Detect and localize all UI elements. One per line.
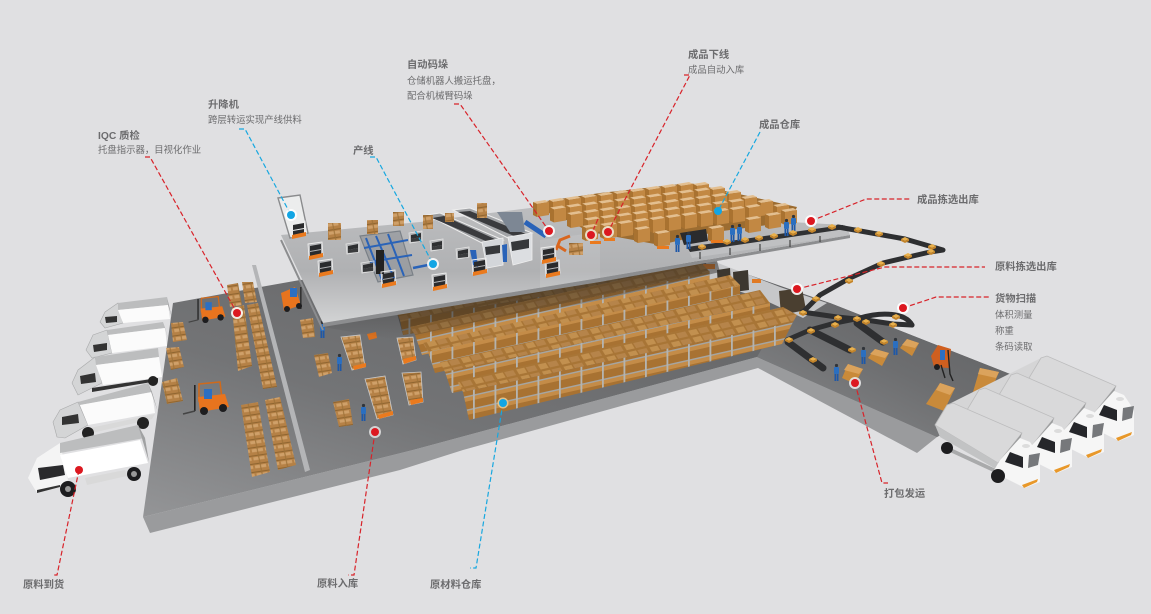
callout: finished goods warehouse: 成品仓库	[759, 118, 800, 131]
callout: material picking	[791, 260, 1057, 295]
panel: conveyor parcels	[698, 224, 936, 363]
panel: inbound shelf carts	[341, 332, 423, 419]
callout: raw material arrival	[23, 466, 83, 591]
callout: cargo scanning: 体积测量	[995, 309, 1033, 320]
callout: raw material arrival: 原料到货	[23, 578, 64, 591]
truck fleet canvas backing	[947, 358, 1116, 433]
icon: inbound truck 5	[100, 297, 172, 328]
chart: material rack row C	[423, 275, 740, 373]
panel: mezzanine platform	[281, 208, 850, 330]
icon: inbound truck 1	[28, 425, 149, 497]
panel: spiral conveyor to warehouse	[803, 227, 943, 312]
chart: material rack row A	[457, 307, 797, 420]
callout: raw material warehouse: 原材料仓库	[430, 578, 481, 591]
icon: inbound truck 3	[72, 348, 162, 395]
panel: lower floor slab side	[143, 357, 937, 533]
icon: sorting workers	[834, 338, 898, 381]
callout: raw material inbound: 原料入库	[317, 577, 358, 590]
callout: production line: 产线	[353, 144, 374, 157]
callout: auto palletizing: 自动码垛	[407, 58, 449, 71]
callout: finished goods picking	[805, 193, 979, 227]
callout: cargo scanning: 货物扫描	[995, 292, 1036, 305]
panel: outbound conveyor table	[687, 225, 850, 259]
callout: finished goods warehouse	[714, 118, 800, 215]
callout: lift: 跨层转运实现产线供料	[208, 114, 302, 125]
callout: finished goods picking: 成品拣选出库	[917, 193, 979, 206]
icon: inbound truck 4	[86, 322, 170, 358]
panel: AGV carts	[308, 231, 560, 291]
chart: material rack row E	[397, 270, 660, 335]
panel: shipping floor	[757, 300, 1033, 437]
callout: auto palletizing: 仓储机器人搬运托盘，	[407, 75, 501, 86]
panel: sorting conveyors	[787, 312, 912, 368]
panel: production line stations	[427, 208, 570, 268]
back wall with dark racks	[683, 258, 827, 318]
callout: cargo scanning: 条码读取	[995, 341, 1033, 352]
callout: packing and shipping	[849, 377, 926, 500]
icon: outbound truck B	[967, 388, 1072, 473]
callout: material picking: 原料拣选出库	[995, 260, 1057, 273]
panel: parcels on shipping floor	[842, 339, 999, 411]
panel: mezzanine shadow on racks	[323, 261, 720, 340]
icon: picking workers	[675, 215, 796, 252]
callout: IQC inspection	[98, 129, 243, 319]
icon: lift frame	[278, 195, 308, 239]
callout: lift: 升降机	[208, 98, 240, 111]
callout: finished goods off line: 成品下线	[688, 48, 730, 61]
callout: raw material warehouse	[430, 398, 508, 591]
callout: cargo scanning: 称重	[995, 325, 1014, 336]
icon: outbound truck D	[1029, 356, 1134, 441]
chart: material rack row D	[410, 262, 710, 355]
panel: mezzanine material stacks	[328, 203, 583, 255]
callout: finished goods off line	[585, 48, 744, 241]
chart: material rack row B	[440, 290, 770, 393]
callout: cargo scanning	[897, 292, 1036, 352]
panel: inbound pallet stacks	[162, 282, 353, 477]
icon: floor workers	[320, 321, 366, 421]
callout: IQC inspection: 托盘指示器，目视化作业	[98, 144, 201, 155]
callout: IQC inspection: IQC 质检	[98, 129, 140, 142]
callout: production line	[353, 144, 439, 270]
callout: raw material inbound	[317, 426, 381, 590]
callout: auto palletizing: 配合机械臂码垛	[407, 90, 473, 101]
divider wall on lower floor	[252, 265, 310, 472]
icon: outbound forklift	[931, 345, 953, 381]
callout: packing and shipping: 打包发运	[884, 487, 926, 500]
callout: auto palletizing	[407, 58, 555, 237]
panel: finished goods warehouse pallets	[533, 182, 797, 249]
icon: forklifts	[183, 287, 302, 415]
callout: finished goods off line: 成品自动入库	[688, 64, 744, 75]
callout: lift	[208, 98, 302, 221]
panel: production line machines blue	[360, 231, 433, 282]
icon: inbound truck 2	[53, 383, 158, 439]
icon: outbound truck A	[935, 403, 1040, 488]
panel: lower warehouse floor	[143, 258, 1033, 517]
icon: outbound truck C	[999, 373, 1104, 458]
